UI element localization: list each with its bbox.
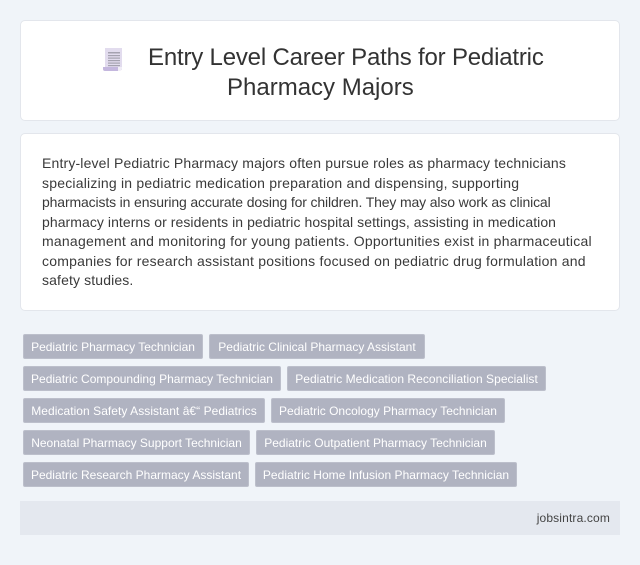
tag: Pediatric Oncology Pharmacy Technician	[279, 404, 497, 418]
tag	[23, 334, 203, 359]
tag	[255, 462, 517, 487]
description text: management and monitoring for young patients. Opportunities exist in pharmaceutical	[42, 233, 592, 249]
description panel	[20, 133, 620, 311]
description text: safety studies.	[42, 272, 133, 288]
title: Pharmacy Majors	[227, 74, 414, 101]
tag: Pediatric Research Pharmacy Assistant	[31, 468, 241, 482]
tag: Neonatal Pharmacy Support Technician	[31, 436, 242, 450]
tag	[256, 430, 495, 455]
tag	[287, 366, 546, 391]
description text	[42, 155, 592, 288]
description text: pharmacy interns or residents in pediatric hospital settings, assisting in medication	[42, 214, 556, 230]
tag: Medication Safety Assistant â€“ Pediatrics	[31, 404, 257, 418]
description text: Entry-level Pediatric Pharmacy majors often pursue roles as pharmacy technicians	[42, 155, 566, 171]
tag: Pediatric Clinical Pharmacy Assistant	[218, 340, 416, 354]
description text: pharmacists in ensuring accurate dosing for children. They may also work as clinical	[42, 194, 551, 210]
tag	[271, 398, 505, 423]
title: Entry Level Career Paths for Pediatric	[148, 44, 544, 71]
title	[148, 44, 544, 101]
icon: document	[103, 48, 122, 71]
description text: specializing in pediatric medication preparation and dispensing, supporting	[42, 174, 519, 190]
tag: Pediatric Home Infusion Pharmacy Technician	[263, 468, 509, 482]
tag: Pediatric Compounding Pharmacy Technician	[31, 372, 273, 386]
tag	[23, 430, 250, 455]
tag	[209, 334, 425, 359]
header panel	[20, 20, 620, 121]
description text: companies for research assistant positions focused on pediatric drug formulation and	[42, 252, 586, 268]
tag	[23, 398, 265, 423]
tag	[23, 366, 281, 391]
tag list	[23, 334, 546, 487]
tag	[23, 462, 249, 487]
footer bar	[20, 501, 620, 535]
tag: Pediatric Pharmacy Technician	[31, 340, 195, 354]
tag: Pediatric Outpatient Pharmacy Technician	[264, 436, 487, 450]
tag: Pediatric Medication Reconciliation Specialist	[295, 372, 538, 386]
footer source text: jobsintra.com	[537, 511, 610, 525]
